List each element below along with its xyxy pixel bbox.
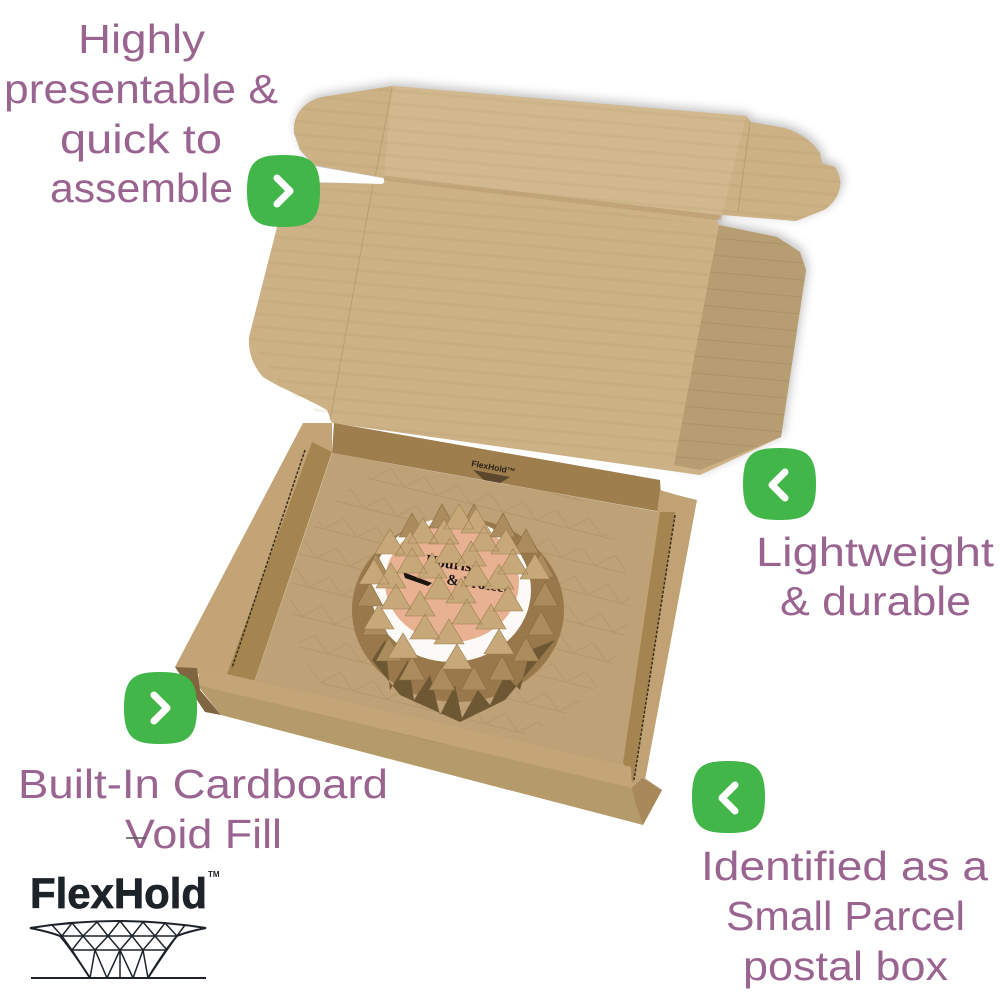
text: small parcel: postal box (743, 943, 949, 989)
text: lightweight and durable (756, 529, 995, 624)
box floor (254, 453, 660, 770)
wrapped product with FlexHold triangles (352, 504, 564, 722)
lid panel: base (249, 86, 840, 475)
box back wall (332, 423, 662, 512)
text: highly presentable: quick to (60, 116, 222, 162)
text: highly presentable: assemble (50, 165, 233, 211)
badge: lightweight (743, 448, 816, 520)
text: built-in void fill: Built-In Cardboard (18, 761, 388, 807)
box corner folds (175, 667, 221, 715)
text: small parcel (701, 843, 988, 989)
box outer front wall (197, 680, 662, 825)
text: highly presentable: Highly (78, 16, 206, 62)
lid panel: top flap (384, 86, 746, 215)
lid panel: right inner flap (674, 225, 806, 470)
box left wall outer (175, 423, 332, 684)
FlexHold logo: TM (208, 870, 220, 879)
lid surface grain (249, 86, 840, 475)
text: small parcel: Small Parcel (726, 893, 965, 939)
cardboard box base (175, 423, 697, 825)
text: built-in void fill: Void Fill (125, 811, 282, 857)
text: small parcel: Identified as a (701, 843, 988, 889)
text: lightweight and durable: & durable (780, 578, 971, 624)
text: lightweight and durable: Lightweight (756, 529, 995, 575)
kraft triangles (359, 504, 550, 669)
box left inner wall (227, 442, 332, 682)
copper label (385, 522, 519, 642)
open lid of the box (249, 83, 842, 475)
label text fragments: Nourish (424, 552, 481, 577)
badge: highly presentable (247, 155, 320, 227)
dark shadow pleats (352, 518, 564, 702)
icon: chevron left (722, 785, 735, 811)
box front flap (197, 668, 632, 788)
badge: void fill (124, 672, 197, 744)
wrapped product with FlexHold triangles: & Protect (445, 572, 510, 597)
text: built-in void fill (18, 761, 388, 857)
icon: chevron left (772, 472, 785, 498)
icon: chevron right (277, 178, 290, 204)
icon: chevron right (154, 695, 167, 721)
FlexHold logo (30, 870, 220, 978)
text: highly presentable (4, 16, 278, 211)
outer ring of kraft triangles (357, 504, 558, 690)
small back wall logo: FlexHold™ (471, 458, 516, 476)
logo lattice mark (30, 921, 206, 978)
white disc (371, 518, 531, 662)
text: highly presentable: presentable & (4, 66, 278, 112)
floor crease pattern (290, 455, 630, 745)
badge: small parcel (692, 761, 765, 833)
box right wall (623, 490, 697, 787)
FlexHold logo: FlexHold (30, 870, 207, 918)
slit in the lid (314, 166, 384, 184)
